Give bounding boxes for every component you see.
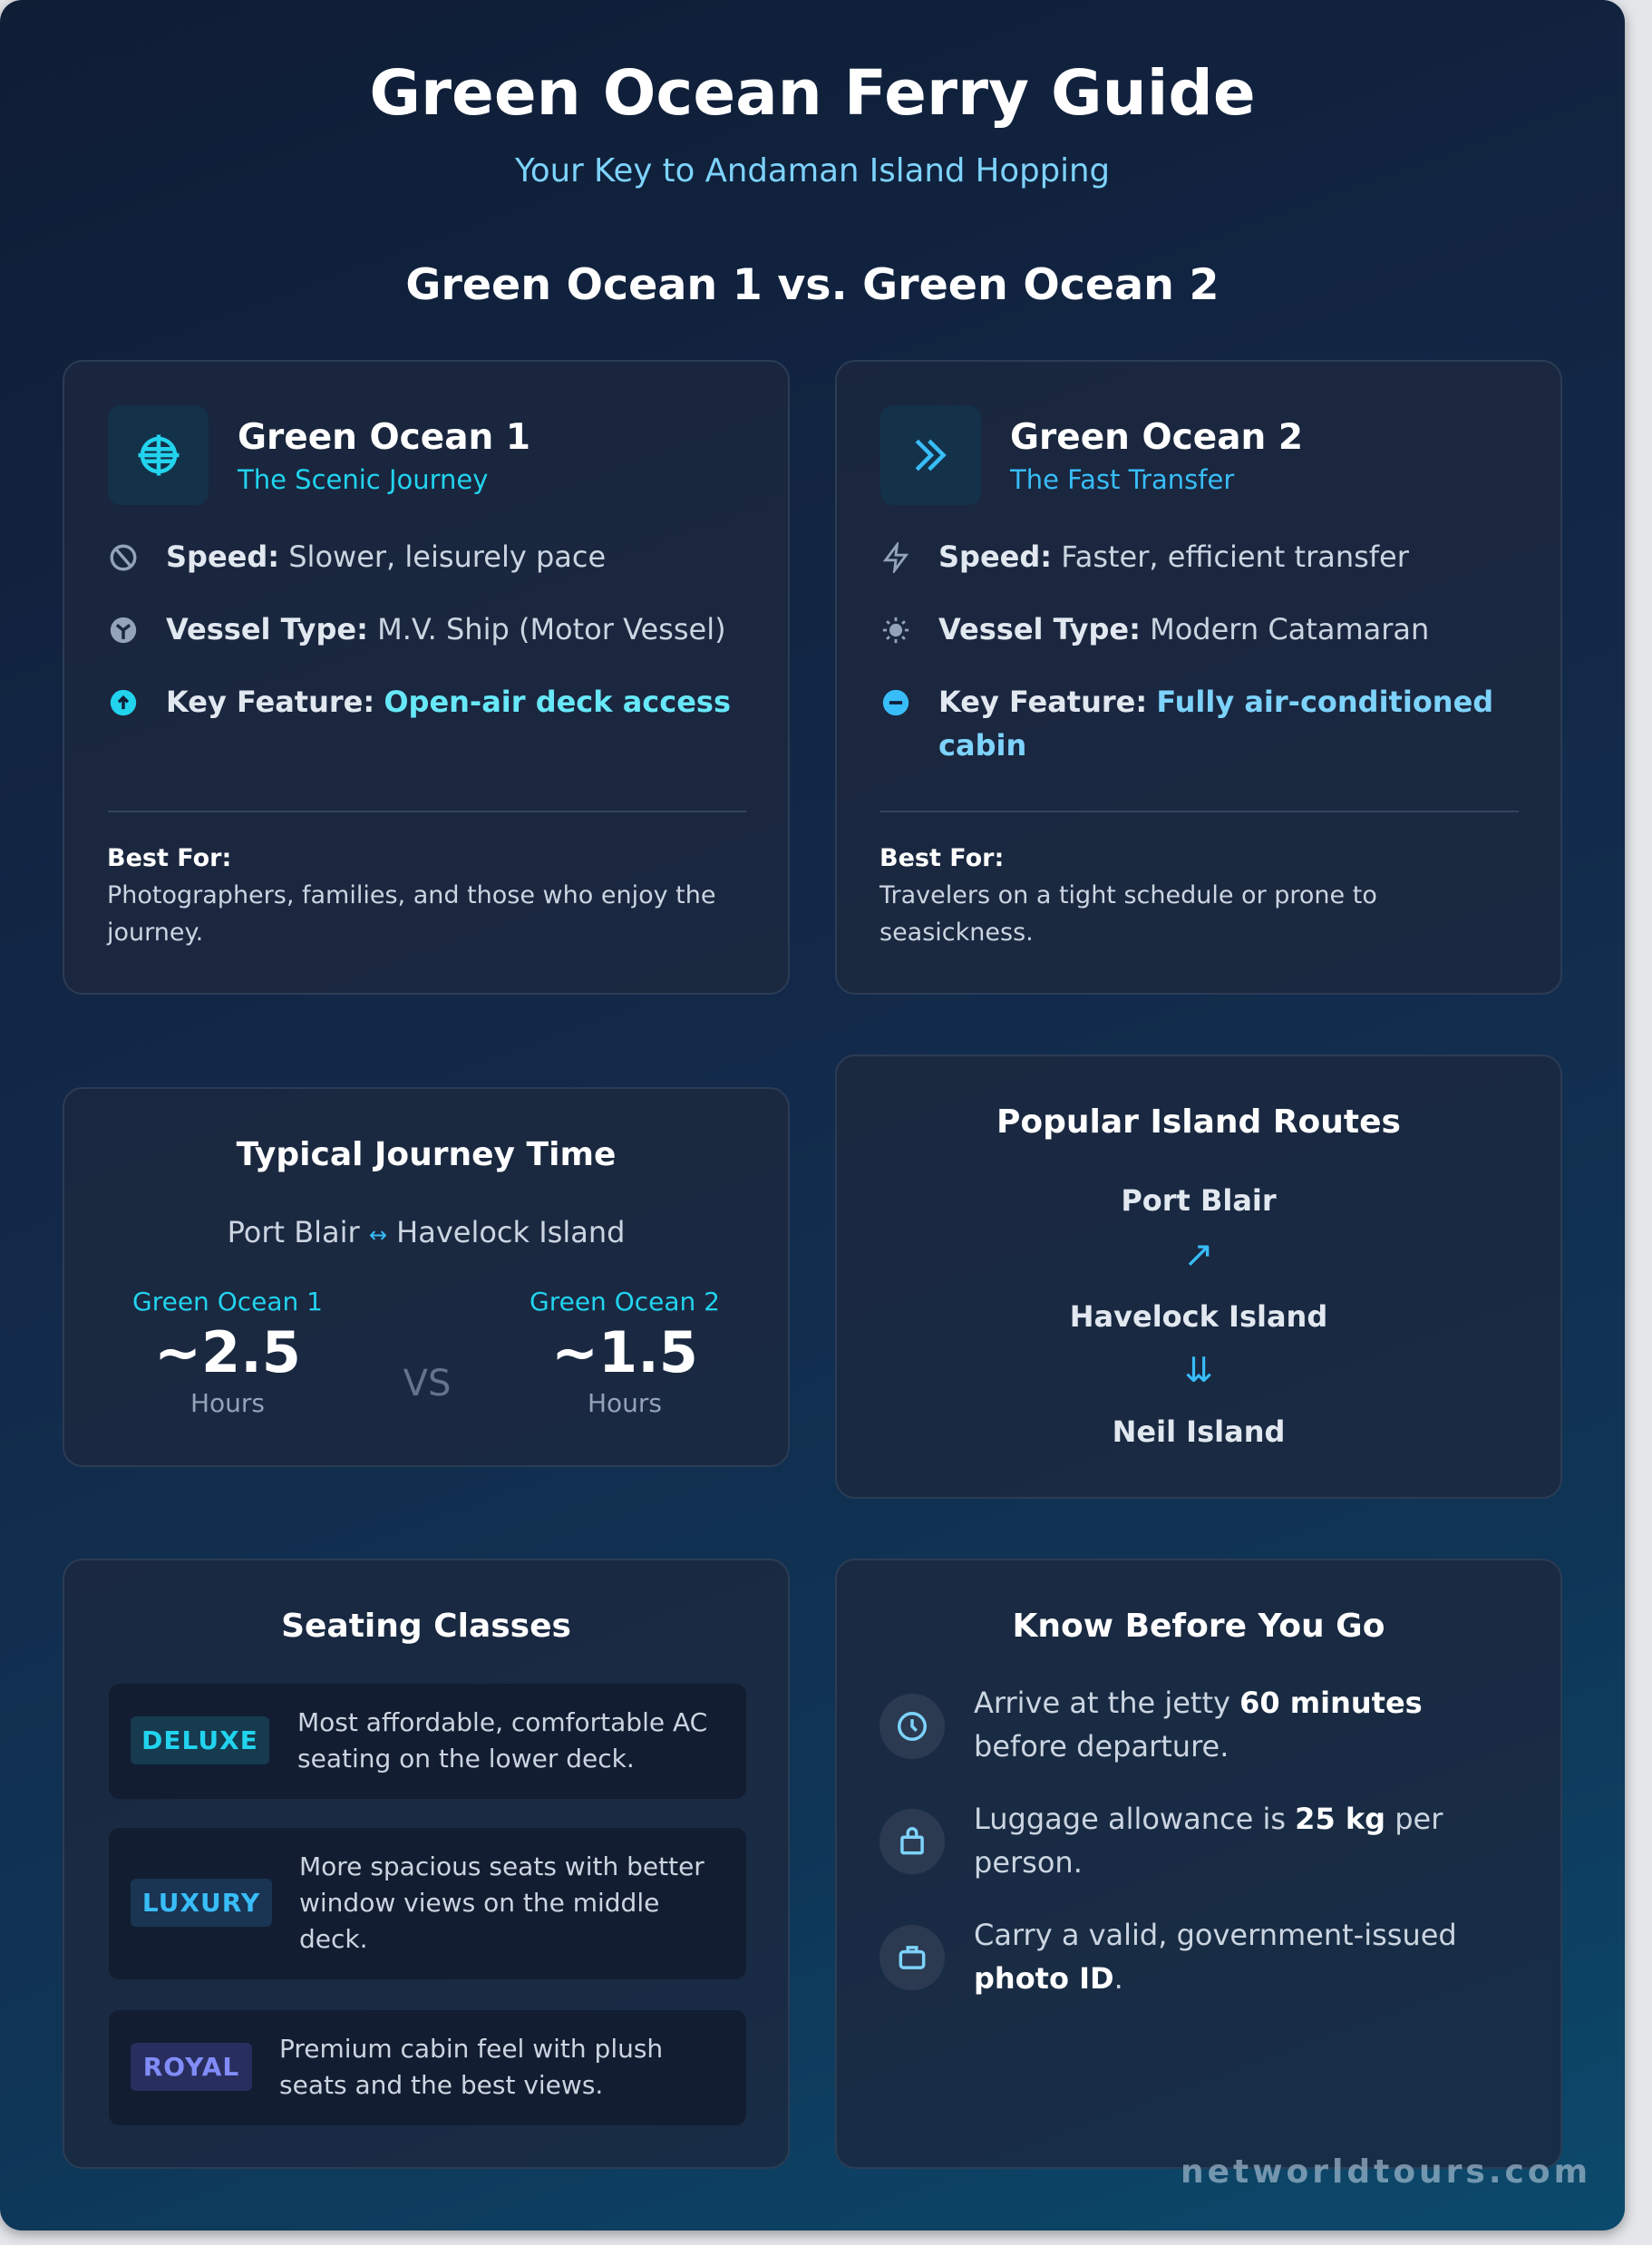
heading: Know Before You Go bbox=[1013, 1608, 1385, 1645]
class: luxury: More spacious seats with better bbox=[299, 1851, 705, 1881]
class: luxury: LUXURY bbox=[142, 1888, 260, 1918]
best for: seasickness. bbox=[879, 918, 1034, 947]
heading: Typical Journey Time bbox=[237, 1136, 616, 1173]
arrow: ↗ bbox=[1183, 1234, 1214, 1276]
subtitle: Your Key to Andaman Island Hopping bbox=[515, 152, 1110, 190]
panel: know before you go bbox=[835, 1559, 1562, 2169]
class: deluxe: seating on the lower deck. bbox=[297, 1744, 635, 1774]
stat: green ocean 2: Hours bbox=[588, 1388, 662, 1418]
stat: green ocean 2 bbox=[530, 1287, 720, 1418]
row: key feature: cabin bbox=[938, 728, 1026, 763]
footer brand: networldtours.com bbox=[1181, 2153, 1591, 2191]
icon: fast arrows bbox=[880, 405, 981, 505]
heading: Seating Classes bbox=[281, 1608, 571, 1645]
stat: green ocean 1 bbox=[132, 1287, 323, 1418]
arrow: ⇊ bbox=[1184, 1350, 1213, 1390]
row: key feature bbox=[883, 685, 1493, 763]
panel: Green Ocean 1 bbox=[63, 360, 790, 995]
row: vessel: Vessel Type: M.V. Ship (Motor Vessel) bbox=[166, 612, 726, 646]
divider bbox=[880, 811, 1519, 812]
row: speed: Speed: Faster, efficient transfer bbox=[938, 539, 1409, 574]
tip: arrival: Arrive at the jetty 60 minutes bbox=[974, 1686, 1423, 1720]
heading: Popular Island Routes bbox=[996, 1103, 1401, 1141]
stat: green ocean 2: ~1.5 bbox=[551, 1319, 698, 1385]
tip: luggage: Luggage allowance is 25 kg per bbox=[974, 1802, 1443, 1836]
title: Green Ocean Ferry Guide bbox=[369, 57, 1256, 130]
heading: Green Ocean 1 bbox=[238, 417, 530, 458]
class: royal bbox=[109, 2010, 746, 2125]
route text: Port Blair ↔ Havelock Island bbox=[228, 1215, 625, 1249]
tip: photo id: photo ID. bbox=[974, 1961, 1123, 1996]
tagline: The Scenic Journey bbox=[238, 464, 488, 495]
class: deluxe bbox=[109, 1684, 746, 1799]
best for bbox=[879, 844, 1377, 947]
row: speed: Speed: Slower, leisurely pace bbox=[166, 539, 606, 574]
stat: green ocean 1: Hours bbox=[190, 1388, 265, 1418]
panel: journey time bbox=[63, 1087, 790, 1467]
class: royal: seats and the best views. bbox=[279, 2070, 603, 2100]
class: royal: ROYAL bbox=[143, 2052, 239, 2082]
comparison heading: Green Ocean 1 vs. Green Ocean 2 bbox=[405, 260, 1220, 310]
panel: seating classes bbox=[63, 1559, 790, 2169]
panel: routes bbox=[835, 1054, 1562, 1499]
route: Neil: Neil Island bbox=[1113, 1414, 1285, 1449]
panel: Green Ocean 2 bbox=[835, 360, 1562, 995]
class: deluxe: Most affordable, comfortable AC bbox=[297, 1707, 707, 1737]
tip: luggage: person. bbox=[974, 1845, 1083, 1880]
stat: green ocean 1: ~2.5 bbox=[154, 1319, 301, 1385]
stat: green ocean 1: Green Ocean 1 bbox=[132, 1287, 323, 1317]
class: luxury bbox=[109, 1828, 746, 1979]
class: luxury: deck. bbox=[299, 1924, 368, 1954]
best for: Best For: bbox=[879, 844, 1004, 872]
row: key feature: Key Feature: Open-air deck access bbox=[166, 685, 731, 719]
best for: journey. bbox=[107, 918, 203, 947]
best for bbox=[107, 844, 715, 947]
tip: arrival bbox=[879, 1686, 1423, 1764]
tagline: The Fast Transfer bbox=[1010, 464, 1234, 495]
icon: globe bbox=[108, 405, 209, 505]
best for: Best For: bbox=[107, 844, 231, 872]
best for: Photographers, families, and those who enjoy the bbox=[107, 881, 715, 909]
divider bbox=[108, 811, 746, 812]
best for: Travelers on a tight schedule or prone to bbox=[879, 881, 1377, 909]
tip: photo id bbox=[879, 1918, 1457, 1996]
class: deluxe: DELUXE bbox=[141, 1725, 258, 1755]
class: royal: Premium cabin feel with plush bbox=[279, 2034, 663, 2064]
tip: arrival: before departure. bbox=[974, 1729, 1229, 1764]
tip: luggage bbox=[879, 1802, 1443, 1880]
route: Havelock: Havelock Island bbox=[1070, 1299, 1327, 1334]
tip: photo id: Carry a valid, government-issued bbox=[974, 1918, 1457, 1952]
vs label: VS bbox=[403, 1363, 451, 1404]
stat: green ocean 2: Green Ocean 2 bbox=[530, 1287, 720, 1317]
row: key feature: Key Feature: Fully air-conditioned bbox=[938, 685, 1493, 719]
class: luxury: window views on the middle bbox=[299, 1888, 659, 1918]
heading: Green Ocean 2 bbox=[1010, 417, 1303, 458]
row: vessel: Vessel Type: Modern Catamaran bbox=[938, 612, 1429, 646]
route: Port Blair: Port Blair bbox=[1121, 1183, 1277, 1218]
